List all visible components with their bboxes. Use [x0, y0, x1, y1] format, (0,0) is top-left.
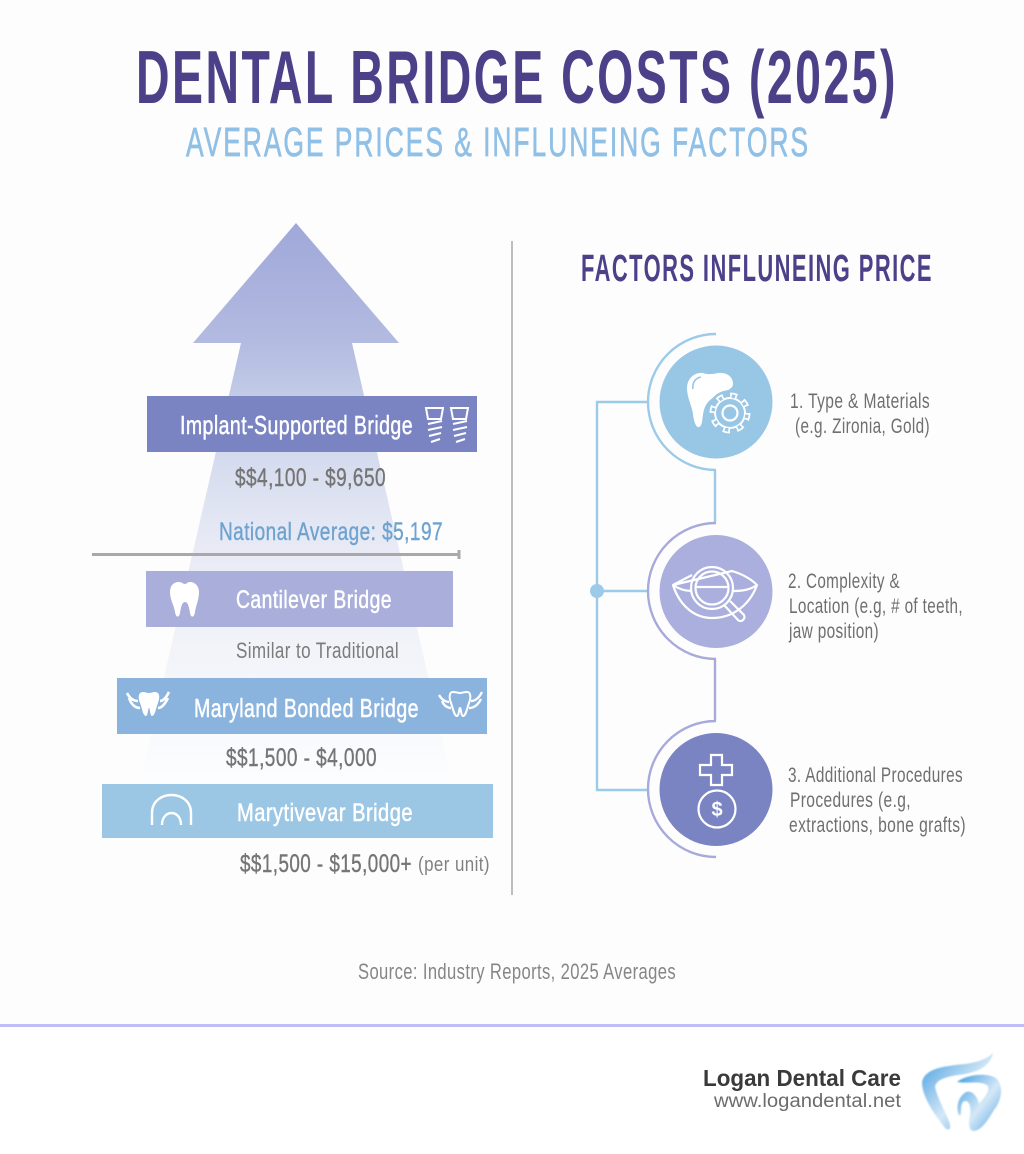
price: marytivevar: $$1,500 - $15,000+ [240, 850, 412, 878]
center divider [511, 241, 513, 895]
bar: marytivevar bridge [102, 784, 493, 838]
note: cantilever price: Similar to Traditional [236, 638, 399, 663]
bar: maryland bonded bridge [117, 678, 487, 734]
bar: implant-supported bridge [147, 396, 477, 452]
bar: implant-supported bridge: Implant-Supported Bridge [180, 410, 413, 440]
bar: cantilever bridge [146, 571, 453, 627]
factor 3 label [788, 764, 966, 837]
factor 3 label: Procedures (e.g, [790, 789, 911, 812]
icon: implant screws [426, 408, 468, 442]
rising arrow [138, 223, 454, 790]
bar: cantilever bridge: Cantilever Bridge [236, 586, 392, 614]
factor 3: additional procedures [648, 721, 966, 857]
icon: cross and dollar coin: $ [711, 799, 723, 821]
price: maryland bonded: $$1,500 - $4,000 [226, 744, 377, 772]
icon: winged tooth outline [439, 692, 482, 716]
national average label: National Average: $5,197 [219, 518, 443, 546]
source note: Source: Industry Reports, 2025 Averages [358, 959, 676, 984]
factor 1: type and materials [648, 334, 930, 522]
factor 1 label: 1. Type & Materials [790, 390, 930, 413]
footer brand text: Logan Dental Care [703, 1065, 901, 1091]
factor 2 label [788, 570, 963, 643]
factor 2 label: 2. Complexity & [788, 570, 900, 593]
footer brand text [703, 1065, 902, 1112]
footer band [0, 1027, 1024, 1154]
bar: marytivevar bridge: Marytivevar Bridge [237, 799, 413, 827]
panel: bridge price ladder [92, 223, 493, 878]
price: marytivevar: (per unit) [418, 854, 490, 876]
factor 2: complexity and location [648, 523, 963, 721]
factor 2 label: jaw position) [788, 620, 879, 643]
icon: winged tooth filled [127, 692, 169, 716]
icon: cross and dollar coin [698, 755, 736, 828]
logo: tooth swoosh [922, 1053, 1001, 1131]
icon: arch [152, 795, 191, 825]
factor 3 label: extractions, bone grafts) [789, 814, 966, 837]
bar: maryland bonded bridge: Maryland Bonded Bridge [194, 693, 419, 723]
icon: tooth with gear [687, 373, 753, 436]
icon: eye with magnifier [673, 567, 757, 621]
connector bracket [590, 402, 647, 790]
footer brand text: www.logandental.net [713, 1091, 902, 1112]
factor 1 label [790, 390, 930, 438]
factor 1 label: (e.g. Zironia, Gold) [795, 415, 930, 438]
factor 2 label: Location (e.g, # of teeth, [789, 595, 963, 618]
price: implant-supported: $$4,100 - $9,650 [235, 464, 386, 492]
national average line [92, 550, 459, 559]
footer divider [0, 1024, 1024, 1027]
panel: factors diagram [590, 334, 966, 857]
icon: tooth [170, 582, 199, 617]
factor 3 label: 3. Additional Procedures [788, 764, 963, 787]
